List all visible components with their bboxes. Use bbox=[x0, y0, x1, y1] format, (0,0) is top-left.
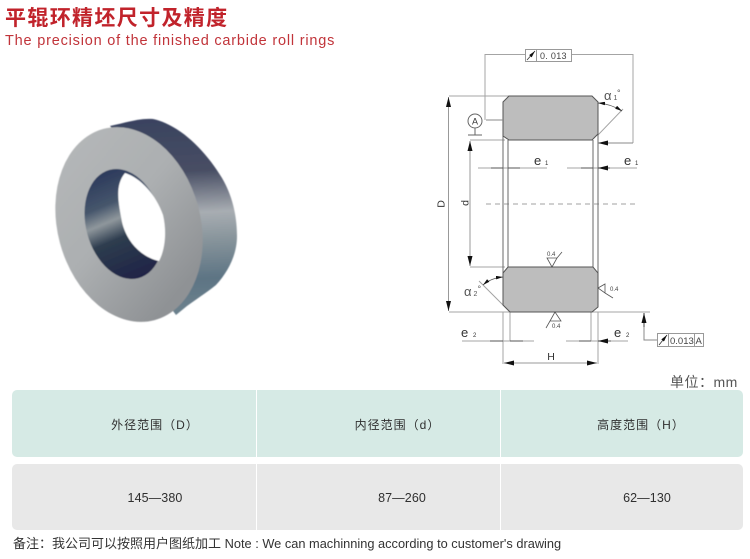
top section block bbox=[503, 96, 598, 140]
dimensions e1: 1 bbox=[545, 161, 549, 167]
dimensions e2: e bbox=[614, 325, 621, 340]
value: outer diameter: 145—380 bbox=[128, 491, 182, 505]
header: inner diameter: 内径范围（d） bbox=[355, 418, 440, 432]
dimensions e2: 2 bbox=[626, 333, 630, 339]
table value row bbox=[12, 464, 743, 530]
surface finish marks 0.4 bbox=[546, 252, 619, 330]
header: height: 高度范围（H） bbox=[597, 418, 685, 432]
bottom section block bbox=[503, 267, 598, 312]
tolerance arrows to ring bbox=[486, 120, 633, 143]
runout tolerance frame 0.013: 0. 013 bbox=[540, 51, 567, 61]
surface finish marks 0.4: 0.4 bbox=[610, 287, 619, 293]
angle alpha 2: 2 bbox=[474, 291, 478, 298]
dimensions e2: e bbox=[461, 325, 468, 340]
dimension H: H bbox=[547, 351, 555, 363]
gray leader lines bbox=[449, 54, 650, 364]
table header row bbox=[12, 390, 743, 457]
dimension d bbox=[460, 141, 472, 266]
value: height: 62—130 bbox=[623, 491, 671, 505]
dimensions e1: e bbox=[534, 153, 541, 168]
unit label: 单位：mm bbox=[670, 374, 738, 390]
angle alpha 2: α bbox=[464, 284, 472, 299]
angle alpha 2 bbox=[464, 277, 503, 299]
datum A symbol bbox=[468, 114, 482, 135]
concentricity tolerance frame 0.013 A: A bbox=[696, 336, 702, 347]
ring inner wall bbox=[73, 160, 175, 288]
dimensions e2 bbox=[461, 325, 630, 341]
ring front face bbox=[34, 110, 224, 339]
angle alpha 1 bbox=[598, 88, 622, 111]
concentricity tolerance frame 0.013 A: 0.013 bbox=[670, 336, 694, 347]
dimensions e1: e bbox=[624, 153, 631, 168]
title: Chinese heading: 平辊环精坯尺寸及精度 bbox=[5, 7, 228, 30]
dimensions e2: 2 bbox=[473, 333, 477, 339]
dimension D: D bbox=[436, 200, 448, 208]
datum A symbol: A bbox=[472, 116, 478, 126]
ring outer side band bbox=[110, 119, 237, 315]
ring section walls bbox=[503, 134, 598, 273]
header: outer diameter: 外径范围（D） bbox=[111, 418, 199, 432]
footnote: 备注：我公司可以按照用户图纸加工 Note : We can machinning according to customer's drawing bbox=[13, 536, 561, 551]
angle alpha 1: ° bbox=[617, 88, 621, 98]
ring hole opening bbox=[118, 173, 165, 261]
technical drawing: ring cross-section bbox=[436, 49, 704, 366]
dimension d: d bbox=[460, 200, 472, 206]
surface finish marks 0.4: 0.4 bbox=[552, 324, 561, 330]
dimension H bbox=[504, 351, 597, 363]
dimensions e1: 1 bbox=[635, 161, 639, 167]
dimensions e1 bbox=[491, 153, 639, 168]
angle alpha 2: ° bbox=[478, 284, 482, 294]
angle alpha 1: 1 bbox=[614, 95, 618, 102]
runout tolerance frame 0.013 bbox=[526, 50, 572, 62]
angle alpha 1: α bbox=[604, 88, 612, 103]
concentricity tolerance frame 0.013 A bbox=[644, 313, 704, 347]
center line bbox=[486, 203, 636, 205]
value: inner diameter: 87—260 bbox=[378, 491, 426, 505]
surface finish marks 0.4: 0.4 bbox=[547, 252, 556, 258]
illustration: carbide roll ring bbox=[54, 118, 238, 322]
subtitle: English heading: The precision of the finished carbide roll rings bbox=[5, 32, 335, 48]
